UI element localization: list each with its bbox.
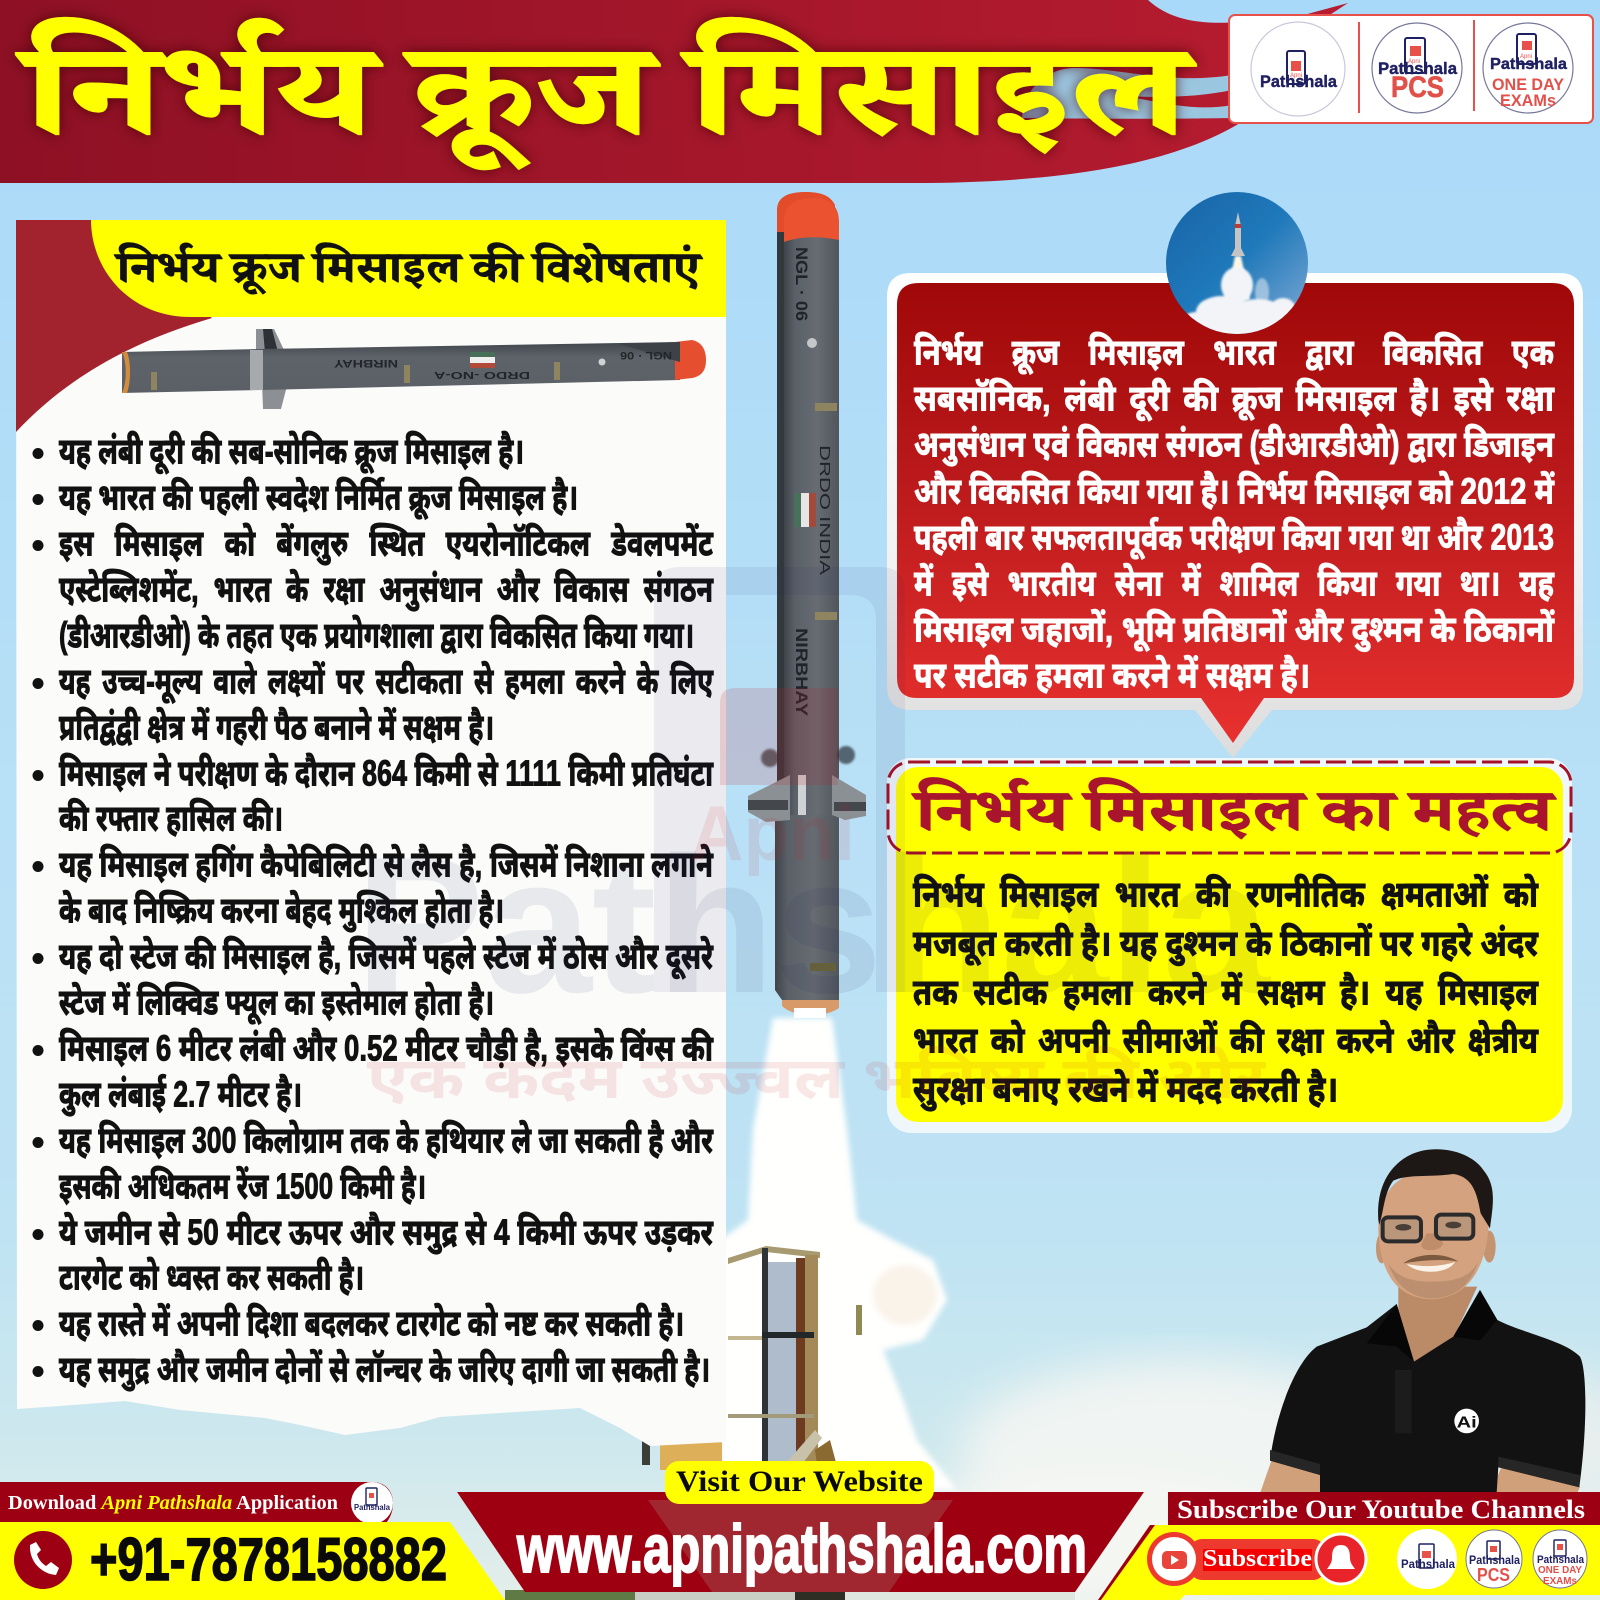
panel heading: निर्भय मिसाइल का महत्व: [911, 778, 1556, 843]
sleeve bands: [1270, 1450, 1580, 1487]
yellow subscribe band: [1098, 1525, 1600, 1600]
bullet list: यह लंबी दूरी की सब-सोनिक क्रूज मिसाइल है।: [59, 430, 524, 474]
panel: significance: [887, 758, 1572, 1133]
download logo: Pathshala: [354, 1503, 391, 1512]
rocket exhaust: [1231, 256, 1252, 301]
missile rear shadow body: [777, 230, 787, 820]
panel: features: [16, 220, 726, 1446]
watermark tagline: एक कदम उज्ज्वल भविष्य की ओर: [367, 1046, 1267, 1111]
ground strip: [505, 1590, 1075, 1600]
panel yellow fill: [896, 767, 1563, 1122]
face: [1378, 1170, 1489, 1299]
shirt: [1270, 1290, 1585, 1493]
panel paragraph: सुरक्षा बनाए रखने में मदद करती है।: [913, 1068, 1338, 1112]
download logo: [351, 1482, 393, 1524]
watermark Pathshala: Pathshala: [355, 817, 1272, 1034]
subscribe heading: Subscribe Our Youtube Channels: [1177, 1495, 1585, 1524]
callout paragraph: पर सटीक हमला करने में सक्षम है।: [914, 654, 1310, 696]
missile markings: [792, 247, 833, 717]
yellow phone band: [0, 1522, 505, 1600]
logo: Pathshala PCS: Pathshala: [1378, 59, 1458, 78]
bullet list: प्रतिद्वंद्वी क्षेत्र में गहरी पैठ बनाने में सक्षम है।: [59, 706, 494, 748]
red corner: [16, 220, 212, 432]
jaw stubble: [1388, 1262, 1478, 1298]
bullet list: एस्टेब्लिशमेंट, भारत के रक्षा अनुसंधान और विकास संगठन: [59, 568, 714, 612]
watermark Apni: Apni: [690, 789, 855, 877]
channel logo: Pathshala: [1397, 1529, 1457, 1589]
missile markings: NIRBHAY: [792, 628, 811, 717]
watermark phone icon: [654, 567, 905, 992]
collar shade: [1367, 1290, 1497, 1362]
vertical Nirbhay missile: [748, 192, 866, 1018]
logo: Pathshala One Day Exams: ONE DAY: [1492, 75, 1565, 94]
launcher frame: [642, 1246, 862, 1490]
bullet list: कुल लंबाई 2.7 मीटर है।: [59, 1072, 302, 1116]
horizontal missile image: NIRBHAY: [333, 357, 398, 369]
bullet list: (डीआरडीओ) के तहत एक प्रयोगशाला द्वारा विकसित किया गया।: [59, 614, 694, 656]
footer: website banner: [457, 1461, 1144, 1592]
horizontal missile image: DRDO -NO-A: [434, 369, 530, 380]
nose shade: [1421, 1233, 1443, 1250]
eyes: [1395, 1224, 1411, 1231]
watermark: [355, 567, 1272, 1111]
neck: [1398, 1287, 1477, 1363]
callout red fill: [897, 283, 1574, 743]
moustache: [1403, 1255, 1458, 1263]
bullet list: यह समुद्र और जमीन दोनों से लॉन्चर के जरिए दागी जा सकती है।: [59, 1348, 710, 1392]
channel logo: One Day Exams: [1533, 1530, 1587, 1588]
missile flag: [470, 352, 495, 368]
logo: Pathshala PCS: PCS: [1391, 71, 1444, 104]
footer: download and phone: [0, 1482, 505, 1600]
logo: Pathshala One Day Exams: Pathshala: [1490, 56, 1567, 73]
visit pill: [665, 1461, 934, 1504]
logo: Pathshala One Day Exams: EXAMs: [1500, 91, 1556, 110]
callout outer border and pointer: [887, 273, 1583, 758]
channel logo: One Day Exams: EXAMs: [1543, 1576, 1577, 1587]
horizontal missile image: NGL · 06: [620, 349, 672, 361]
bullet list: के बाद निष्क्रिय करना बेहद मुश्किल होता है।: [59, 888, 504, 932]
bullet list: यह दो स्टेज की मिसाइल है, जिसमें पहले स्टेज में ठोस और दूसरे: [59, 934, 714, 980]
panel paragraph: [913, 874, 1539, 1112]
download text: Download Apni Pathshala Application: [8, 1492, 338, 1514]
watermark book: [720, 688, 838, 785]
bullet list: यह भारत की पहली स्वदेश निर्मित क्रूज मिसाइल है।: [59, 476, 578, 520]
channel logo: Pathshala: Pathshala: [1401, 1557, 1455, 1571]
rocket body: [1231, 212, 1245, 256]
bullet list: मिसाइल ने परीक्षण के दौरान 864 किमी से 1111 किमी प्रतिघंटा: [59, 752, 714, 794]
hair: [1378, 1149, 1493, 1228]
missile main body: [784, 230, 839, 820]
blue swoosh: [1022, 68, 1232, 119]
shirt logo: [1454, 1409, 1479, 1433]
icon: bell: [1316, 1534, 1366, 1584]
glasses: [1383, 1215, 1473, 1241]
missile launch plume: [720, 1018, 957, 1490]
footer: subscribe: [1098, 1492, 1600, 1600]
presenter photo: [1260, 1149, 1585, 1493]
panel sheet with torn edge: [16, 220, 726, 1446]
banner lighter panel: [648, 1500, 953, 1592]
background: clouds: [900, 1360, 1600, 1600]
callout: red description box: [887, 273, 1583, 758]
shirt logo: Ai: [1457, 1415, 1477, 1432]
icon: rocket launch circle: [1166, 192, 1308, 339]
bullet list: की रफ्तार हासिल की।: [59, 798, 283, 838]
missile nozzle: [782, 1000, 839, 1015]
logo box: [1229, 15, 1593, 123]
arms: [1260, 1460, 1320, 1493]
logo: Pathshala PCS: [1372, 23, 1462, 113]
missile flag: [794, 493, 816, 527]
channel logo: One Day Exams: ONE DAY: [1538, 1565, 1582, 1576]
subscribe button: Subscribe: [1203, 1546, 1312, 1572]
rocket cloud: [1182, 267, 1296, 339]
logo: Apni Pathshala: Pathshala: [1260, 72, 1338, 91]
bullet list: इसकी अधिकतम रेंज 1500 किमी है।: [59, 1164, 426, 1206]
bullet list: ये जमीन से 50 मीटर ऊपर और समुद्र से 4 किमी ऊपर उड़कर: [59, 1210, 714, 1254]
missile markings: NGL · 06: [792, 247, 811, 321]
bullet list: स्टेज में लिक्विड फ्यूल का इस्तेमाल होता है।: [59, 980, 494, 1024]
horizontal missile image: [122, 329, 706, 409]
phone number: +91-7878158882: [90, 1526, 447, 1593]
bullet list: यह रास्ते में अपनी दिशा बदलकर टारगेट को नष्ट कर सकती है।: [59, 1302, 684, 1344]
callout paragraph: [914, 332, 1555, 696]
missile lower stage: [775, 815, 839, 1000]
logo: Pathshala One Day Exams: [1483, 23, 1573, 113]
panel heading: निर्भय क्रूज मिसाइल की विशेषताएं: [114, 241, 704, 294]
missile nose cones: [777, 192, 835, 232]
website URL: www.apnipathshala.com: [516, 1511, 1087, 1587]
channel logo: One Day Exams: Pathshala: [1537, 1554, 1585, 1566]
bullet list: टारगेट को ध्वस्त कर सकती है।: [59, 1256, 364, 1298]
channel logo: PCS: PCS: [1477, 1565, 1510, 1585]
smile: [1407, 1262, 1455, 1272]
bullet list: [32, 430, 714, 1392]
logo: Pathshala One Day Exams: Apni: [1520, 54, 1532, 60]
missile wings: [748, 746, 866, 822]
bullet list: यह उच्च-मूल्य वाले लक्ष्यों पर सटीकता से हमला करने के लिए: [59, 660, 714, 704]
icon: play: [1162, 1551, 1187, 1569]
dashed heading frame: [888, 762, 1571, 853]
bullet list: इस मिसाइल को बेंगलुरु स्थित एयरोनॉटिकल डेवलपमेंट: [59, 522, 713, 566]
title: निर्भय क्रूज मिसाइल: [16, 18, 1196, 171]
yellow heading band: [91, 220, 726, 317]
bullet list: यह मिसाइल 300 किलोग्राम तक के हथियार ले जा सकती है और: [59, 1118, 714, 1160]
logo: Apni Pathshala: [1251, 22, 1345, 116]
placket: [1395, 1370, 1412, 1433]
subscribe button: [1147, 1532, 1366, 1586]
subscribe heading band: [1168, 1492, 1600, 1526]
ears: [1376, 1233, 1387, 1263]
missile markings: DRDO INDIA: [816, 445, 833, 575]
download tab: [0, 1482, 393, 1523]
logo: Pathshala PCS: Apni: [1408, 59, 1420, 65]
channel logo: PCS: Pathshala: [1469, 1553, 1520, 1567]
header banner: [0, 0, 1348, 183]
channel logo: PCS: [1466, 1530, 1522, 1588]
bullet list: यह मिसाइल हगिंग कैपेबिलिटी से लैस है, जिसमें निशाना लगाने: [59, 842, 714, 884]
icon: phone: [14, 1531, 72, 1589]
logo: Apni Pathshala: Apni: [1290, 73, 1302, 79]
panel outer: [887, 758, 1572, 1133]
plume warm shade: [873, 1265, 937, 1325]
bullet list: मिसाइल 6 मीटर लंबी और 0.52 मीटर चौड़ी है, इसके विंग्स की: [59, 1026, 714, 1068]
visit pill: Visit Our Website: [676, 1465, 923, 1498]
